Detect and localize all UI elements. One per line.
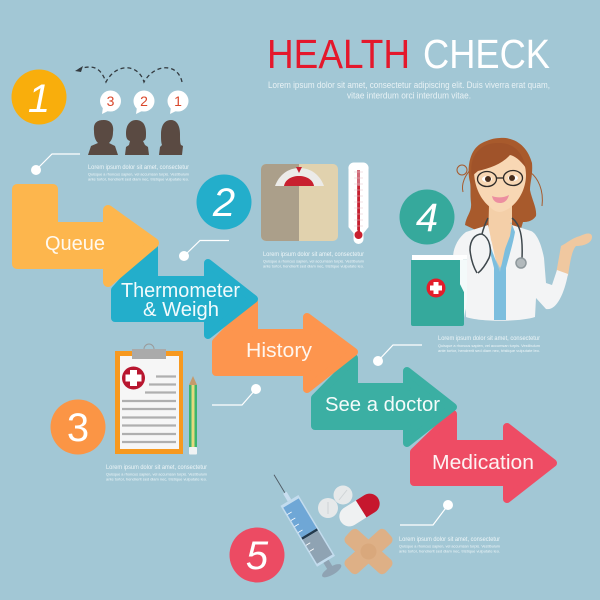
connector 5 — [400, 500, 453, 525]
icon: medical folder — [411, 255, 467, 326]
number badge 5 — [230, 528, 284, 582]
hair strands — [457, 165, 542, 206]
person silhouette male — [88, 120, 118, 155]
icon: pencil — [189, 376, 197, 454]
lab coat — [452, 225, 568, 321]
blue shirt — [488, 222, 515, 320]
subtitle: Lorem ipsum dolor sit amet, consectetur adipiscing elit. Duis viverra erat quam, — [268, 80, 550, 90]
number badge 3: 3 — [67, 406, 89, 450]
speech bubble 2: 2 — [140, 93, 148, 109]
text block 2: Quisque a rhoncus sapien, vel accumsan turpis. Vestibulum — [263, 258, 365, 264]
arrow: see a doctor — [315, 358, 453, 443]
title — [267, 31, 550, 77]
arrow: history — [216, 302, 354, 389]
dashed hop arrows — [75, 66, 182, 82]
arrow: queue: Queue — [45, 233, 105, 255]
hand and forearm — [556, 234, 592, 276]
fringe — [471, 143, 526, 176]
icon: pills — [318, 486, 352, 518]
arrow: see a doctor: See a doctor — [325, 394, 440, 416]
neck — [488, 205, 512, 268]
connector 2 — [179, 240, 229, 261]
number badge 5: 5 — [246, 534, 269, 578]
text block 2 — [263, 251, 365, 268]
arrow: thermometer and weigh — [115, 246, 254, 335]
arrow: history: History — [246, 340, 312, 362]
text block 2: ante tortor, hendrerit sed diam nec, tristique vulputate leo. — [263, 264, 364, 268]
text block 5: ante tortor, hendrerit sed diam nec, tristique vulputate leo. — [399, 548, 500, 554]
text block 1 — [88, 164, 190, 182]
connector 1 — [31, 154, 80, 175]
text block 4: Quisque a rhoncus sapien, vel accumsan turpis. Vestibulum — [438, 343, 541, 348]
speech bubble 3: 3 — [107, 93, 115, 109]
person silhouette short hair — [125, 120, 149, 155]
arrow: thermometer and weigh: & Weigh — [143, 299, 219, 321]
arrow: medication: Medication — [432, 452, 534, 474]
arrow: medication — [414, 414, 553, 499]
number badge 3 — [50, 400, 106, 454]
title: CHECK — [423, 31, 550, 77]
number badge 2 — [196, 174, 252, 230]
icon: capsule — [336, 490, 383, 530]
arrow: queue — [17, 189, 154, 282]
number badge 4: 4 — [416, 196, 438, 240]
subtitle — [268, 80, 550, 100]
number badge 2: 2 — [212, 181, 235, 225]
arrow: thermometer and weigh: Thermometer — [121, 280, 240, 302]
text block 3 — [106, 464, 208, 482]
neck fill — [489, 224, 512, 262]
connector 4 — [373, 345, 422, 366]
stethoscope — [470, 218, 526, 273]
text block 3: ante tortor, hendrerit sed diam nec, tristique vulputate leo. — [106, 476, 207, 482]
text block 1: Quisque a rhoncus sapien, vel accumsan turpis. Vestibulum — [88, 172, 190, 176]
connector 3 — [212, 384, 261, 405]
text block 3: Quisque a rhoncus sapien, vel accumsan turpis. Vestibulum — [106, 472, 208, 476]
number badge 4 — [400, 190, 454, 244]
text block 4: ante tortor, hendrerit sed diam nec, tristique vulputate leo. — [438, 348, 540, 353]
text block 4 — [438, 335, 541, 353]
eyes — [482, 175, 518, 182]
mouth — [492, 195, 509, 203]
face — [474, 148, 526, 212]
number badge 1 — [12, 70, 66, 124]
text block 5 — [399, 536, 501, 554]
illustration: doctor — [452, 138, 592, 321]
person silhouette long hair — [159, 120, 183, 155]
subtitle: vitae interdum orci interdum vitae. — [347, 90, 471, 100]
icon: queue of people — [75, 66, 188, 155]
icon: thermometer — [349, 163, 368, 244]
icon: bandage — [342, 527, 395, 576]
icon: clipboard — [115, 344, 183, 454]
text block 3: Lorem ipsum dolor sit amet, consectetur — [106, 464, 208, 471]
text block 2: Lorem ipsum dolor sit amet, consectetur — [263, 251, 365, 258]
text block 1: Lorem ipsum dolor sit amet, consectetur — [88, 164, 190, 171]
text block 5: Lorem ipsum dolor sit amet, consectetur — [399, 536, 501, 543]
hair back — [465, 138, 536, 232]
text block 4: Lorem ipsum dolor sit amet, consectetur — [438, 335, 541, 342]
text block 5: Quisque a rhoncus sapien, vel accumsan turpis. Vestibulum — [399, 544, 501, 548]
glasses — [478, 170, 522, 186]
icon: syringe — [265, 469, 343, 580]
icon: weighing scale — [261, 164, 338, 241]
title: HEALTH — [267, 31, 410, 77]
text block 1: ante tortor, hendrerit sed diam nec, tristique vulputate leo. — [88, 176, 189, 182]
number badge 1: 1 — [28, 77, 50, 121]
speech bubble 1: 1 — [174, 93, 182, 109]
